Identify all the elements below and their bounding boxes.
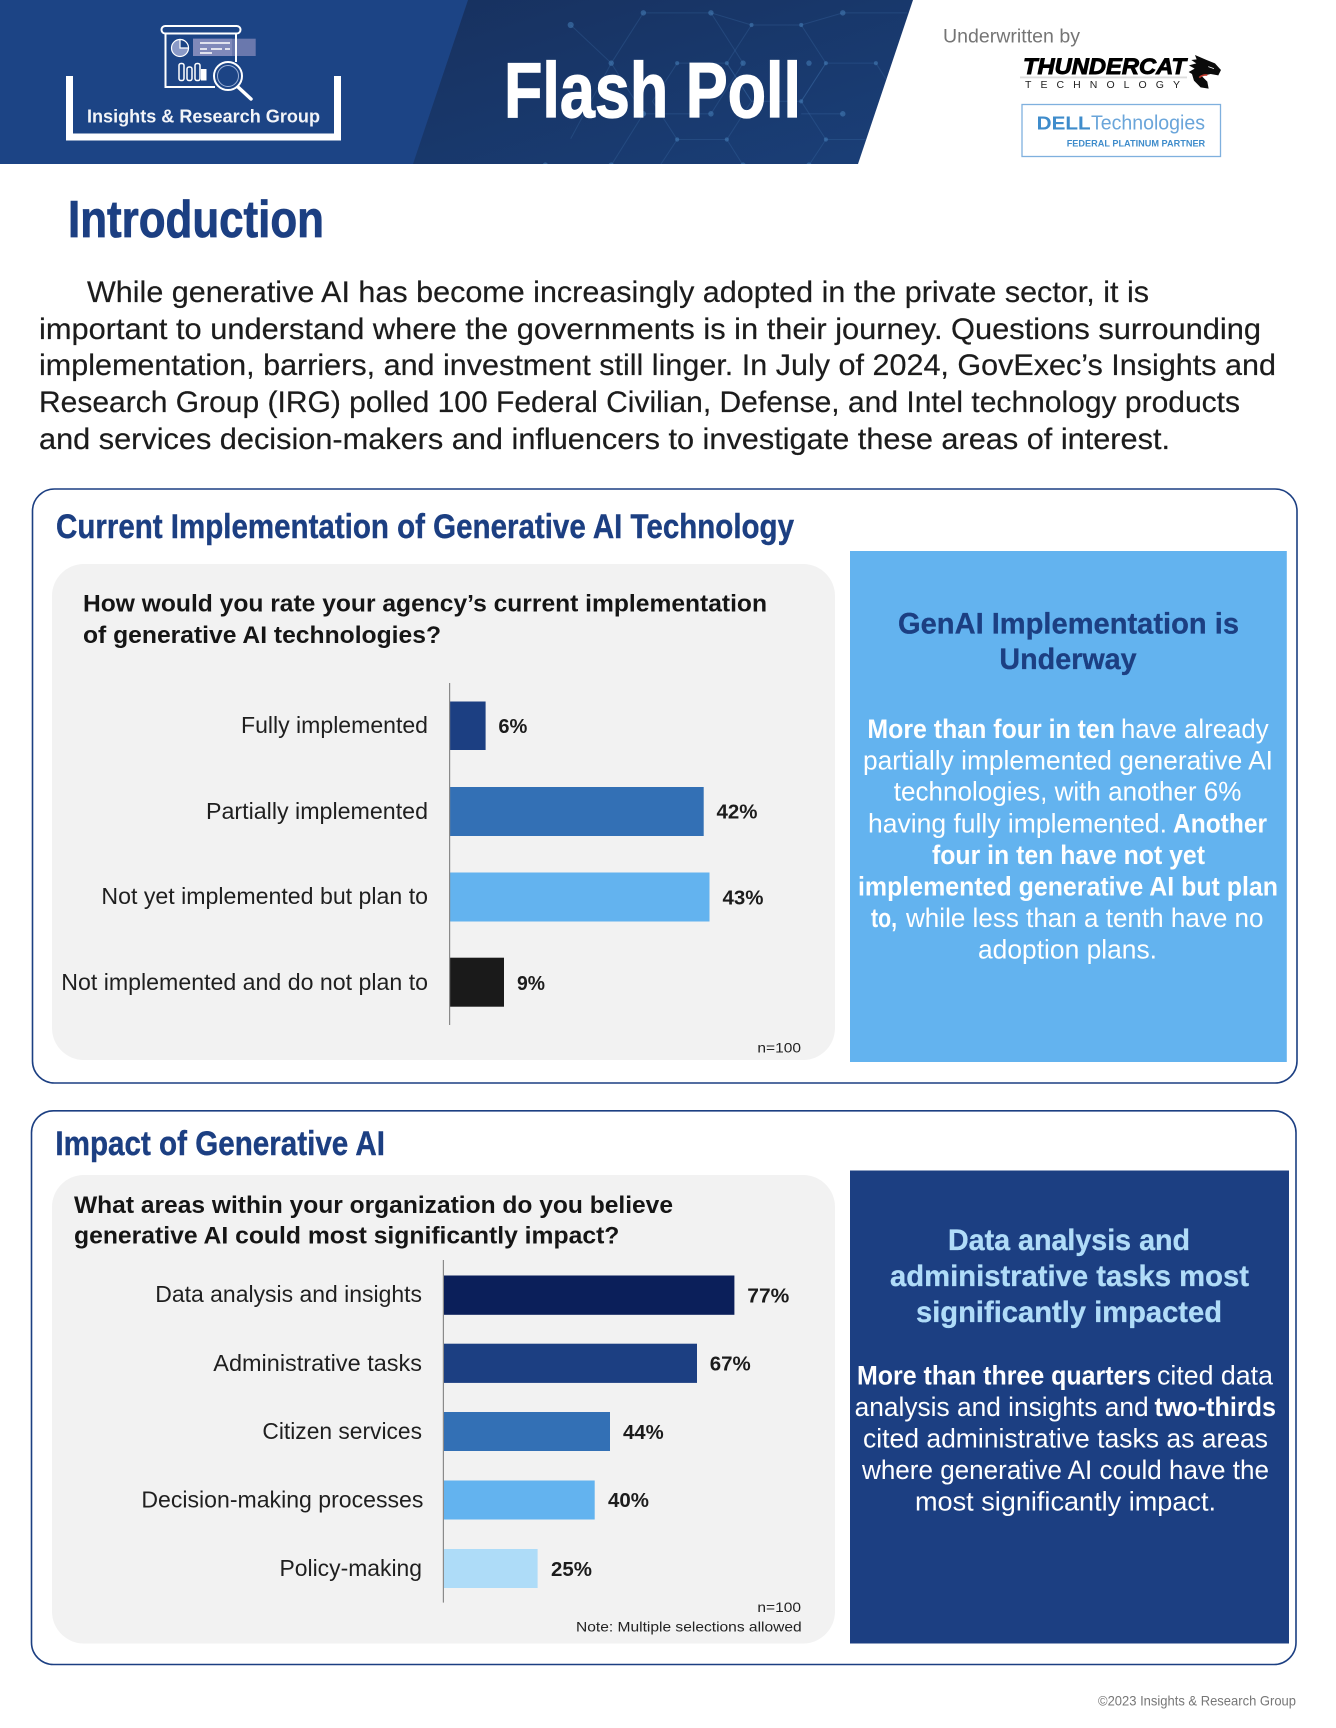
bar: decision-making processes bbox=[141, 1480, 649, 1520]
survey question bbox=[74, 1192, 673, 1249]
panel heading: Current Implementation of Generative AI Technology bbox=[56, 508, 794, 546]
callout body: most significantly impact. bbox=[915, 1486, 1216, 1516]
bar: partially implemented bbox=[206, 787, 758, 836]
logo: Insights & Research Group bbox=[70, 26, 338, 137]
hexagon network pattern bbox=[543, 10, 907, 168]
sample size note: Note: Multiple selections allowed bbox=[576, 1618, 802, 1634]
callout: implementation underway bbox=[850, 551, 1287, 1062]
footer copyright: ©2023 Insights & Research Group bbox=[1098, 1692, 1296, 1708]
sample size note: n=100 bbox=[757, 1599, 801, 1615]
panel outline bbox=[32, 1111, 1296, 1664]
callout body: where generative AI could have the bbox=[861, 1455, 1269, 1485]
bar: citizen services: 44% bbox=[623, 1421, 664, 1444]
logo: Dell Technologies partner box: DELL bbox=[1037, 112, 1091, 133]
callout heading: administrative tasks most bbox=[890, 1260, 1249, 1293]
bar: administrative tasks: 67% bbox=[710, 1352, 751, 1376]
callout body: four in ten have not yet bbox=[932, 840, 1205, 870]
bar: partially implemented: 42% bbox=[716, 800, 758, 823]
callout body: More than four in ten bbox=[867, 714, 1115, 744]
callout body: technologies, with another 6% bbox=[894, 777, 1241, 807]
bar: policy-making bbox=[280, 1549, 592, 1588]
bar: not implemented and do not plan to: Not implemented and do not plan to bbox=[61, 969, 428, 995]
intro paragraph: implementation, barriers, and investment still linger. In July of 2024, GovExec’s Insights and bbox=[39, 349, 1276, 382]
underwritten by label: Underwritten by bbox=[943, 26, 1080, 48]
callout heading: significantly impacted bbox=[916, 1296, 1222, 1329]
bar: fully implemented: Fully implemented bbox=[241, 712, 428, 738]
logo: Thundercat Technology bbox=[1020, 54, 1221, 91]
callout body: cited data bbox=[1157, 1360, 1273, 1390]
callout body: while less than a tenth have no bbox=[905, 903, 1264, 933]
icon: panther head bbox=[1189, 55, 1221, 89]
banner left blue bbox=[0, 0, 500, 164]
survey question: of generative AI technologies? bbox=[83, 622, 441, 649]
callout body: adoption plans. bbox=[978, 934, 1157, 964]
intro paragraph: Research Group (IRG) polled 100 Federal Civilian, Defense, and Intel technology products bbox=[39, 386, 1240, 419]
bar: decision-making processes: 40% bbox=[608, 1489, 649, 1512]
bar: not implemented and do not plan to bbox=[61, 958, 545, 1007]
bar: data analysis and insights: Data analysis and insights bbox=[155, 1281, 422, 1307]
logo: Dell Technologies partner box: Technologies bbox=[1091, 111, 1205, 134]
bar: policy-making: 25% bbox=[551, 1558, 592, 1581]
callout body: two-thirds bbox=[1154, 1392, 1276, 1422]
logo text: Insights & Research Group bbox=[87, 106, 320, 126]
panel heading: Impact of Generative AI bbox=[55, 1125, 385, 1163]
bar: partially implemented: Partially implemented bbox=[206, 798, 428, 824]
chart card: implementation bbox=[52, 564, 835, 1060]
survey question: generative AI could most significantly impact? bbox=[74, 1222, 619, 1249]
callout body: having fully implemented. bbox=[868, 809, 1167, 839]
callout body: cited administrative tasks as areas bbox=[863, 1424, 1268, 1454]
callout body bbox=[858, 714, 1278, 964]
intro paragraph: important to understand where the governments is in their journey. Questions surrounding bbox=[39, 313, 1261, 346]
callout heading: GenAI Implementation is bbox=[898, 607, 1239, 640]
logo: Dell Technologies partner box: FEDERAL PLATINUM PARTNER bbox=[1067, 139, 1205, 150]
callout heading bbox=[898, 607, 1239, 676]
intro paragraph: While generative AI has become increasingly adopted in the private sector, it is bbox=[87, 276, 1149, 309]
chart card: impact bbox=[52, 1175, 835, 1644]
survey question: What areas within your organization do you believe bbox=[74, 1192, 673, 1219]
callout body: partially implemented generative AI bbox=[863, 745, 1273, 775]
survey question: How would you rate your agency’s current implementation bbox=[83, 590, 767, 618]
logo: Dell Technologies partner box bbox=[1022, 104, 1220, 156]
logo bracket bbox=[70, 76, 338, 137]
callout body bbox=[855, 1360, 1276, 1516]
bar: decision-making processes: Decision-making processes bbox=[141, 1487, 423, 1513]
panel outline bbox=[32, 489, 1297, 1083]
callout heading bbox=[890, 1224, 1249, 1329]
banner dark slanted panel bbox=[413, 0, 913, 164]
intro paragraph bbox=[39, 276, 1276, 456]
bar: not implemented and do not plan to: 9% bbox=[517, 972, 545, 995]
sample size note bbox=[576, 1599, 802, 1634]
callout body: analysis and insights and bbox=[855, 1392, 1149, 1422]
bar chart: impact bbox=[141, 1260, 789, 1603]
sample size note: n=100 bbox=[757, 1040, 801, 1056]
title: Flash Poll: Flash Poll bbox=[504, 46, 801, 134]
bar: administrative tasks: Administrative tasks bbox=[213, 1350, 422, 1376]
callout body: have already bbox=[1121, 714, 1269, 744]
intro paragraph: and services decision-makers and influencers to investigate these areas of interest. bbox=[39, 423, 1170, 456]
bar: fully implemented: 6% bbox=[498, 715, 527, 738]
bar: not yet implemented but plan to: Not yet implemented but plan to bbox=[101, 883, 428, 909]
logo: Thundercat Technology: THUNDERCAT bbox=[1023, 54, 1188, 79]
callout heading: Underway bbox=[999, 643, 1137, 676]
callout body: Another bbox=[1173, 809, 1267, 839]
heading: Introduction: Introduction bbox=[68, 191, 324, 249]
bar: fully implemented bbox=[241, 702, 527, 750]
survey question bbox=[83, 590, 767, 649]
callout body: More than three quarters bbox=[857, 1360, 1151, 1390]
bar: administrative tasks bbox=[213, 1344, 751, 1383]
callout body: implemented generative AI but plan bbox=[858, 872, 1278, 902]
callout heading: Data analysis and bbox=[948, 1224, 1190, 1257]
logo: Thundercat Technology: TECHNOLOGY bbox=[1025, 79, 1180, 91]
bar chart: implementation bbox=[61, 683, 764, 1025]
bar: not yet implemented but plan to: 43% bbox=[722, 886, 764, 910]
bar: data analysis and insights bbox=[155, 1276, 789, 1315]
callout body: to, bbox=[871, 903, 897, 933]
bar: policy-making: Policy-making bbox=[280, 1555, 422, 1581]
header banner bbox=[0, 0, 913, 168]
bar: not yet implemented but plan to bbox=[101, 872, 763, 922]
panel: impact of generative AI bbox=[32, 1111, 1296, 1664]
icon: presentation board with magnifier bbox=[162, 26, 256, 99]
bar: citizen services: Citizen services bbox=[262, 1418, 422, 1444]
bar: data analysis and insights: 77% bbox=[747, 1284, 789, 1307]
callout: data analysis impact bbox=[850, 1170, 1289, 1644]
panel: current implementation bbox=[32, 489, 1297, 1083]
bar: citizen services bbox=[262, 1412, 664, 1451]
